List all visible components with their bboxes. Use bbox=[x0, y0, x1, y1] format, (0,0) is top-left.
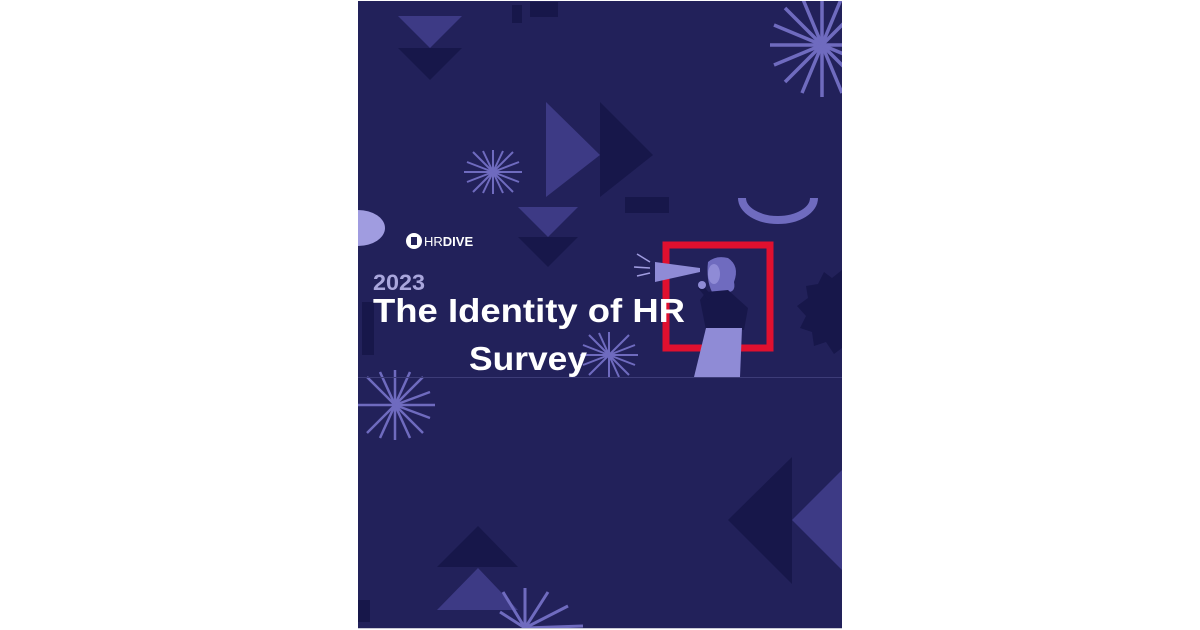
illustration: woman with megaphone bbox=[634, 245, 770, 377]
icon: starburst bottom-left bbox=[358, 370, 435, 440]
divider bbox=[358, 377, 842, 378]
text: year: 2023 bbox=[373, 270, 425, 295]
icon: starburst near title bbox=[580, 332, 638, 378]
icon: starburst bottom bbox=[500, 588, 583, 628]
logo: HR Dive bbox=[406, 233, 473, 249]
decorative middle triangles bbox=[518, 207, 578, 267]
panel: navy cover bbox=[358, 1, 842, 629]
icon: starburst top-right bbox=[770, 1, 842, 97]
icon: play triangles bbox=[546, 102, 669, 213]
title: The Identity of HR bbox=[373, 292, 685, 329]
title bbox=[373, 292, 685, 377]
decorative arc bbox=[742, 198, 814, 220]
decorative half circle bbox=[358, 210, 385, 246]
decorative dark shapes bbox=[362, 270, 842, 355]
decorative bottom triangles bbox=[358, 457, 842, 622]
icon: starburst small bbox=[464, 150, 522, 194]
decorative triangles top-left bbox=[398, 2, 558, 80]
logo: HR Dive: HRDIVE bbox=[424, 234, 473, 249]
infographic cover bbox=[358, 1, 842, 629]
title: Survey bbox=[469, 340, 588, 377]
decorative shapes layer bbox=[358, 0, 874, 628]
